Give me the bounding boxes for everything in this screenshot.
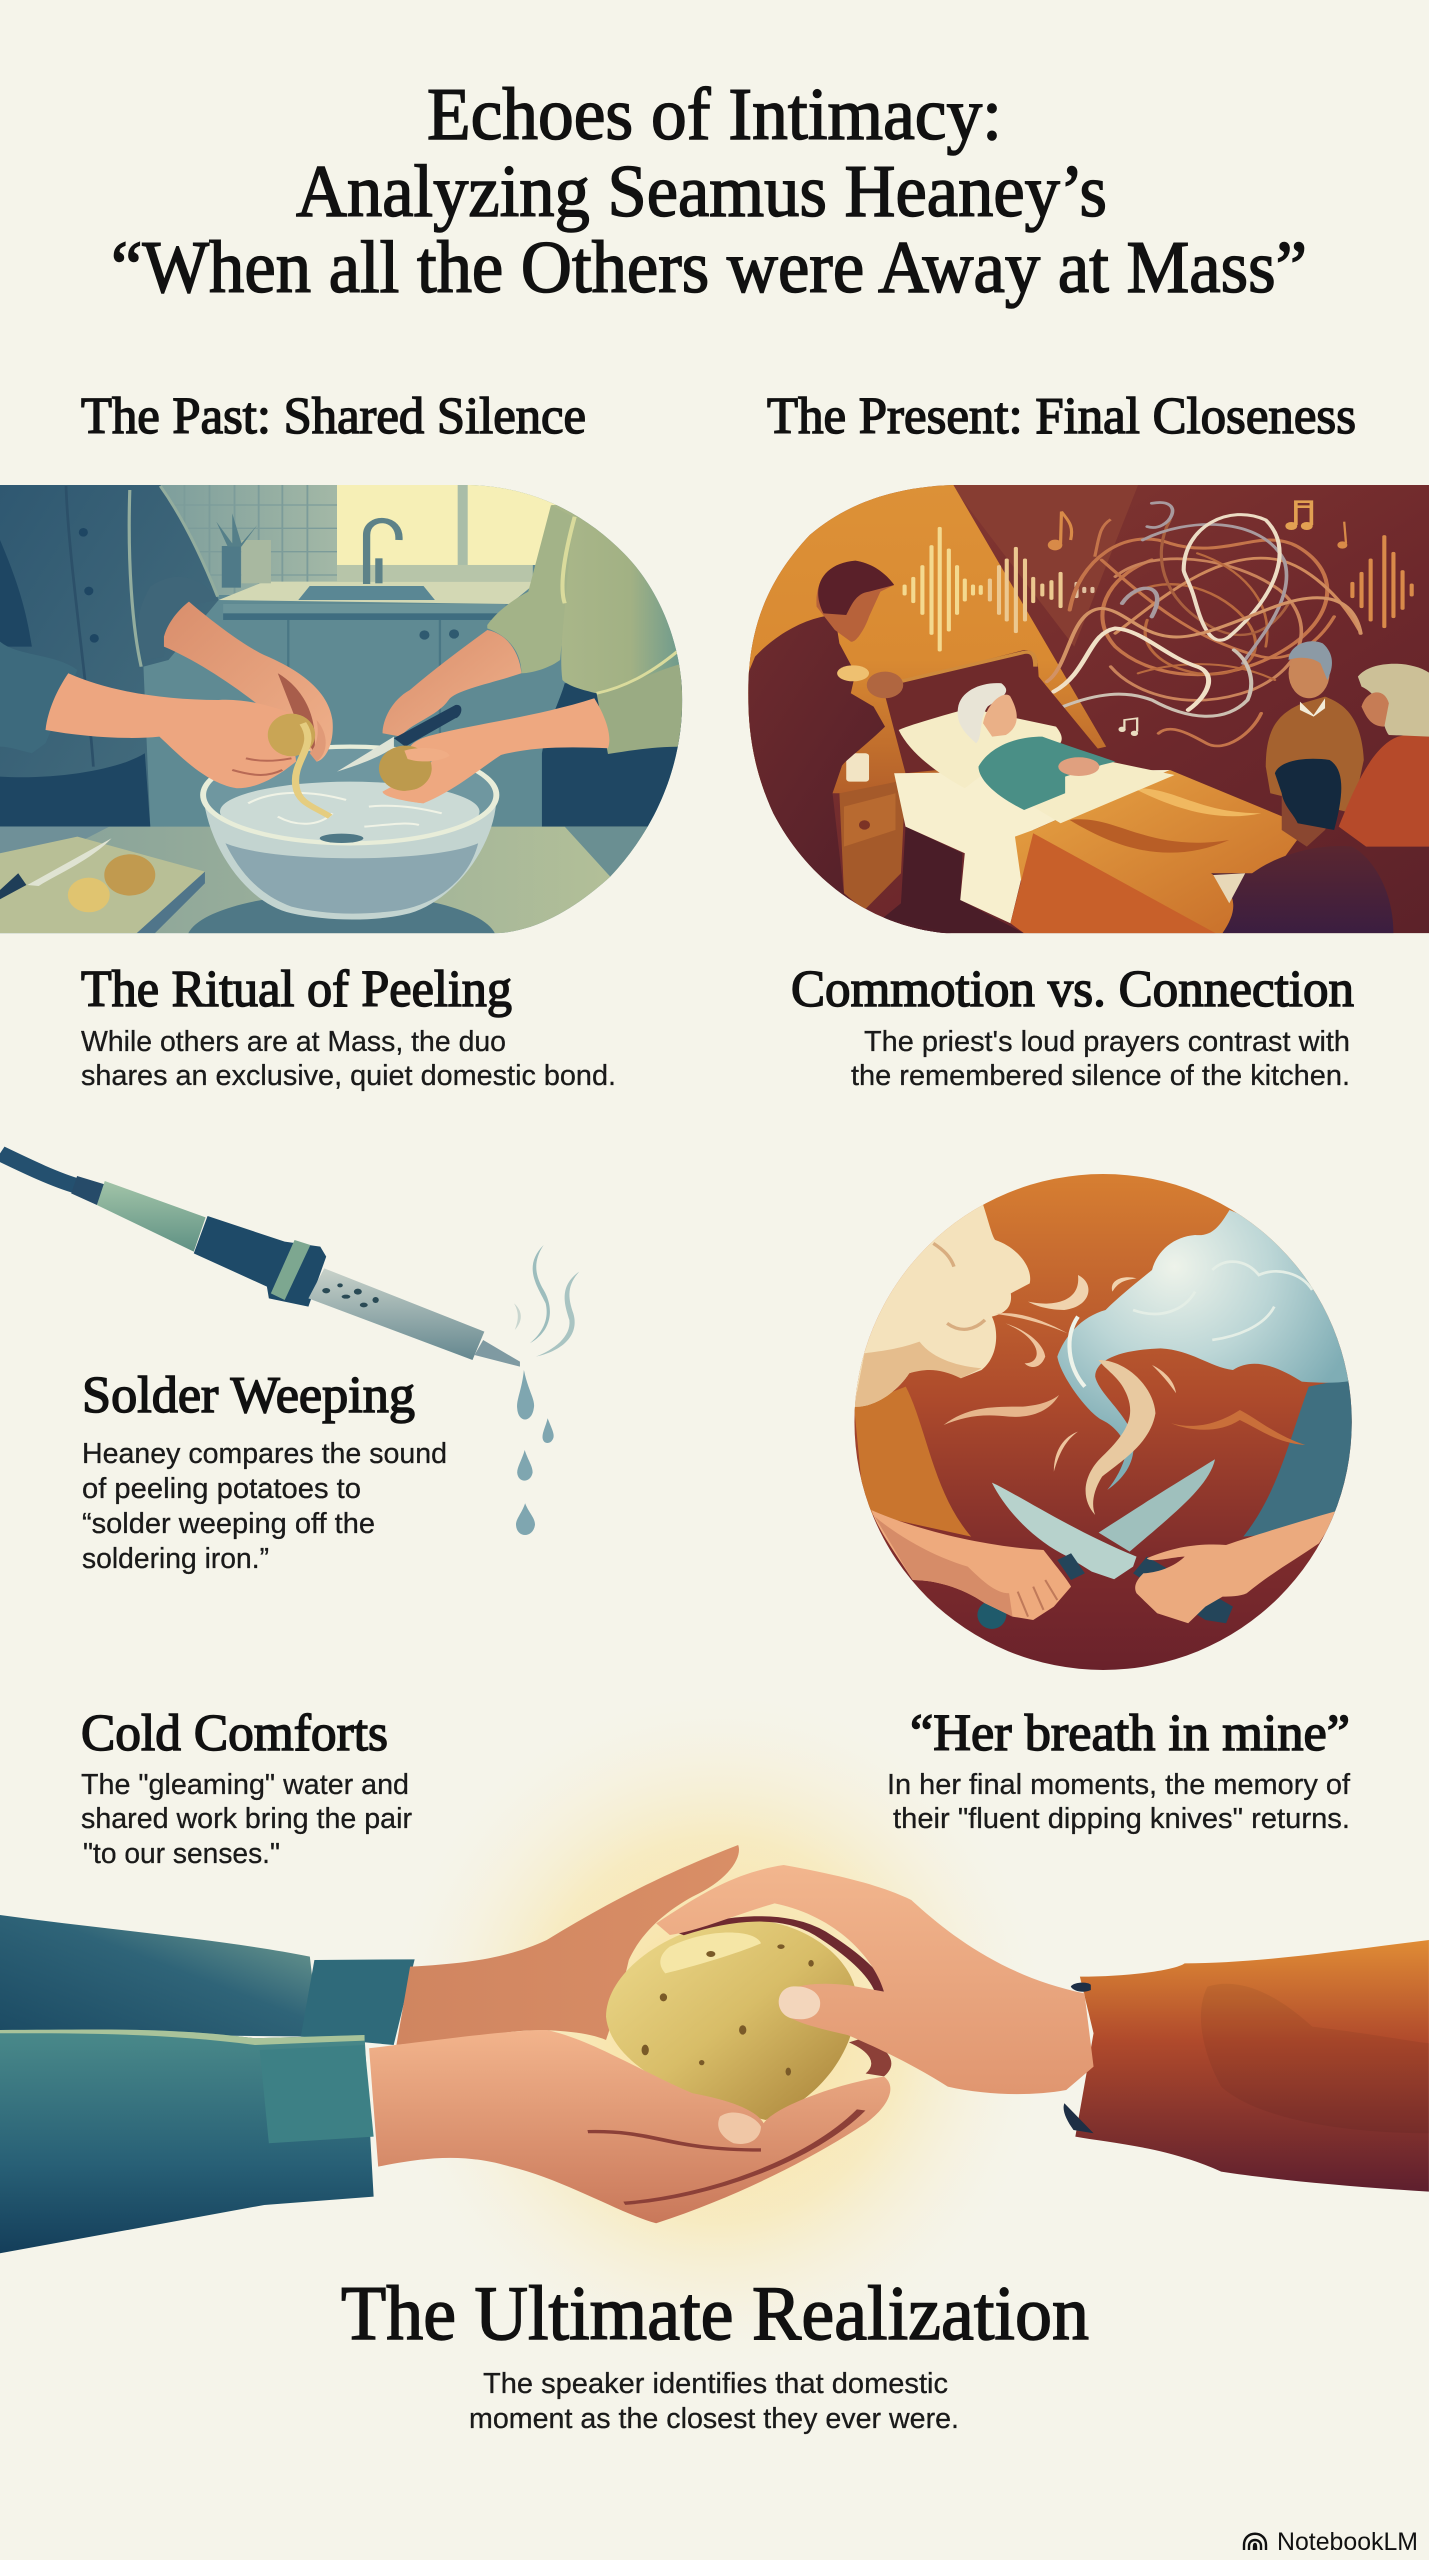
heading: present: The Present: Final Closeness bbox=[767, 388, 1356, 445]
illustration: breath and crossed knives bbox=[854, 1174, 1352, 1670]
caption: commotion vs connection: The priest's loud prayers contrast with bbox=[864, 1026, 1350, 1058]
title: Analyzing Seamus Heaney’s bbox=[296, 151, 1107, 233]
caption: solder weeping bbox=[82, 1367, 447, 1575]
family members bbox=[1211, 641, 1429, 933]
caption: solder weeping: of peeling potatoes to bbox=[82, 1473, 361, 1505]
caption: cold comforts: The "gleaming" water and bbox=[81, 1769, 409, 1801]
table with cutting board bbox=[0, 826, 648, 934]
hands with potato and knife bbox=[46, 602, 609, 817]
brand: NotebookLM: NotebookLM bbox=[1277, 2528, 1418, 2556]
glass bowl of water bbox=[203, 747, 496, 920]
caption: ritual of peeling: The Ritual of Peeling bbox=[81, 961, 512, 1018]
caption: cold comforts: shared work bring the pair bbox=[81, 1803, 412, 1835]
floor and night table bbox=[839, 753, 1024, 933]
caption: cold comforts: Cold Comforts bbox=[81, 1705, 388, 1762]
heading: past: The Past: Shared Silence bbox=[81, 388, 586, 445]
caption: commotion vs connection: the remembered silence of the kitchen. bbox=[851, 1060, 1350, 1092]
right hand over potato bbox=[656, 1865, 1094, 2094]
title: Echoes of Intimacy: bbox=[427, 74, 1002, 156]
right sleeve bbox=[1064, 1940, 1429, 2192]
illustration: hands sharing potato bbox=[0, 1845, 1429, 2253]
front cupped hand bbox=[369, 2030, 890, 2223]
caption: solder weeping: Heaney compares the sound bbox=[82, 1438, 447, 1470]
hands gripping knives bbox=[871, 1510, 1340, 1623]
patient in bed bbox=[894, 683, 1307, 933]
glow behind hands bbox=[378, 1680, 1058, 2380]
caption: solder weeping: Solder Weeping bbox=[82, 1367, 415, 1424]
caption: her breath in mine: “Her breath in mine” bbox=[910, 1705, 1350, 1762]
caption: commotion vs connection bbox=[791, 961, 1354, 1092]
caption: her breath in mine bbox=[887, 1705, 1351, 1835]
caption: ritual of peeling: While others are at Mass, the duo bbox=[81, 1026, 506, 1058]
swirling wisps bbox=[944, 1275, 1305, 1515]
sound waveforms bbox=[905, 528, 1412, 650]
back hand bbox=[396, 1845, 739, 2045]
panel: priest and family at deathbed bbox=[748, 485, 1429, 934]
left breath cloud bbox=[854, 1200, 1030, 1407]
caption: cold comforts: "to our senses." bbox=[83, 1838, 280, 1870]
kitchen wall and window bbox=[160, 485, 556, 734]
caption: solder weeping: soldering iron.” bbox=[82, 1543, 269, 1575]
title bbox=[111, 74, 1307, 309]
caption: her breath in mine: their "fluent dipping knives" returns. bbox=[893, 1803, 1350, 1835]
left sleeves bbox=[0, 1915, 415, 2253]
bed headboard bbox=[883, 650, 1102, 773]
closing text bbox=[469, 2368, 959, 2435]
potato bbox=[606, 1919, 882, 2120]
caption: ritual of peeling: shares an exclusive, quiet domestic bond. bbox=[81, 1060, 616, 1092]
heading: the ultimate realization: The Ultimate Realization bbox=[341, 2270, 1089, 2356]
caption: ritual of peeling bbox=[81, 961, 616, 1092]
left person bbox=[0, 485, 219, 827]
caption: her breath in mine: In her final moments, the memory of bbox=[887, 1769, 1351, 1801]
tangled noise lines bbox=[1047, 503, 1361, 746]
closing text: moment as the closest they ever were. bbox=[469, 2403, 959, 2435]
caption: commotion vs connection: Commotion vs. Connection bbox=[791, 961, 1354, 1018]
right breath cloud bbox=[1057, 1210, 1357, 1490]
caption: solder weeping: “solder weeping off the bbox=[82, 1508, 375, 1540]
closing text: The speaker identifies that domestic bbox=[483, 2368, 948, 2400]
panel: peeling potatoes in kitchen bbox=[0, 485, 682, 934]
priest bbox=[748, 561, 951, 933]
caption: cold comforts bbox=[81, 1705, 412, 1870]
title: “When all the Others were Away at Mass” bbox=[111, 227, 1307, 309]
music notes bbox=[1048, 502, 1347, 736]
icon: soldering iron with steam and drops bbox=[0, 1153, 579, 1535]
right person bbox=[487, 505, 683, 827]
crossed knives bbox=[977, 1459, 1233, 1629]
